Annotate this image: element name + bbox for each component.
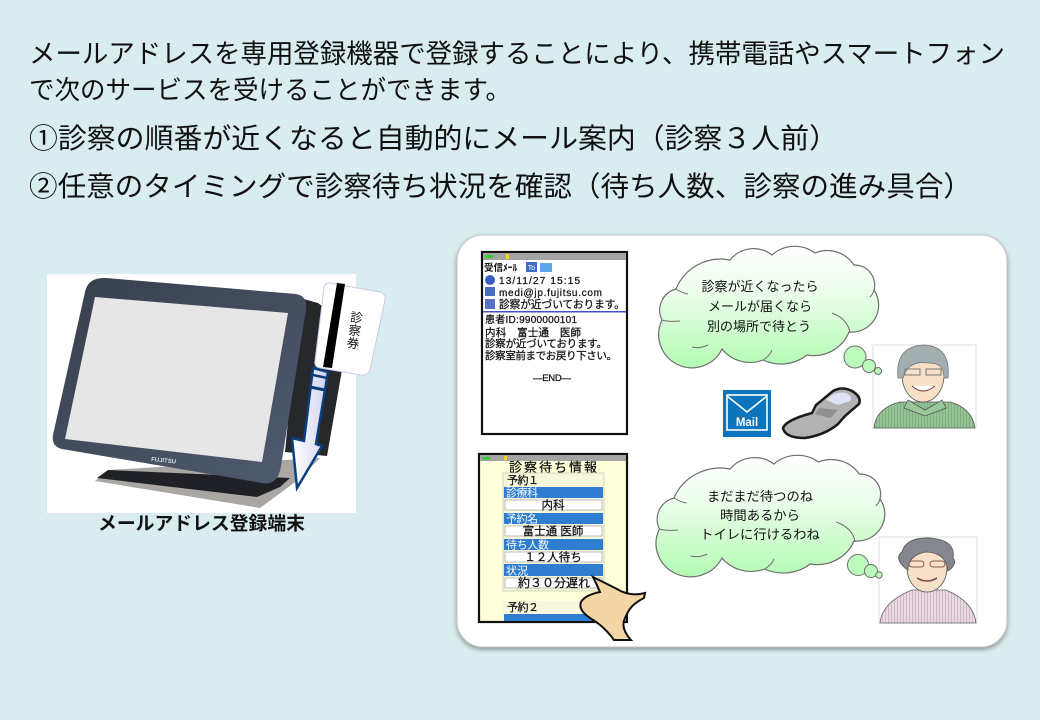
- thought cloud: woman: [656, 455, 885, 578]
- phone screen: waiting status: 予約名: [506, 512, 538, 526]
- heading: introduction and services: メールアドレスを専用登録機器で登録することにより、携帯電話やスマートフォン: [29, 39, 1005, 69]
- phone screen: notification mail: 13/11/27 15:15: [499, 276, 580, 287]
- terminal base: [95, 458, 320, 508]
- terminal logo: FUJITSU: [151, 457, 176, 466]
- thought cloud: woman: 時間あるから: [720, 508, 800, 523]
- heading: introduction and services: ②任意のタイミングで診察待ち状況を確認（待ち人数、診察の進み具合）: [29, 171, 972, 202]
- phone screen: waiting status: 富士通 医師: [523, 525, 583, 538]
- phone screen: waiting status: 内科: [542, 498, 565, 512]
- phone screen: notification mail: 内科 富士通 医師: [485, 326, 582, 339]
- caption: registration terminal: メールアドレス登録端末: [98, 513, 305, 534]
- phone screen: waiting status: 状況: [506, 564, 528, 578]
- thought cloud: man: 診察が近くなったら: [701, 279, 819, 294]
- thought cloud: man: [659, 246, 882, 374]
- card: consultation ticket: 察: [348, 323, 362, 339]
- phone screen: notification mail: 診察が近づいております。: [485, 337, 607, 350]
- icon: mail: Mail: [736, 417, 758, 429]
- phone screen: waiting status: 診察待ち情報: [509, 460, 597, 475]
- phone screen: waiting status: 予約１: [507, 473, 539, 487]
- illustration: registration terminal: [47, 274, 385, 513]
- heading: introduction and services: ①診察の順番が近くなると自動的にメール案内（診察３人前）: [29, 123, 838, 154]
- phone screen: waiting status: 予約２: [507, 600, 539, 614]
- thought cloud: man: 別の場所で待とう: [707, 319, 811, 334]
- phone screen: notification mail: 診察が近づいております。: [499, 298, 625, 311]
- thought cloud: woman: まだまだ待つのね: [707, 489, 813, 504]
- card: consultation ticket: 券: [346, 335, 361, 352]
- thought cloud: woman: トイレに行けるわね: [700, 527, 820, 542]
- panel: usage scenarios: [457, 235, 1007, 647]
- icon: mail: [723, 390, 771, 437]
- card: consultation ticket: 診: [349, 309, 364, 326]
- heading: introduction and services: で次のサービスを受けることができます。: [29, 75, 511, 105]
- terminal foot: [97, 470, 290, 497]
- terminal bezel: [53, 278, 306, 483]
- phone screen: notification mail: medi@jp.fujitsu.com: [499, 288, 602, 299]
- card: consultation ticket: [315, 283, 385, 375]
- phone screen: waiting status: 診療科: [506, 486, 538, 500]
- phone screen: notification mail: 診察室前までお戻り下さい。: [485, 349, 617, 362]
- phone screen: waiting status: [479, 454, 627, 622]
- arrow: insert card downward: [292, 368, 328, 488]
- phone screen: notification mail: —END—: [533, 373, 572, 384]
- thought cloud: man: メールが届くなら: [708, 299, 812, 314]
- icon: flip phone: [783, 388, 860, 438]
- phone screen: notification mail: To: [528, 265, 535, 272]
- phone screen: notification mail: [482, 252, 627, 434]
- phone screen: waiting status: １２人待ち: [524, 550, 582, 564]
- terminal back housing: [285, 298, 342, 456]
- terminal screen: [65, 297, 288, 462]
- portrait: elderly woman: [879, 537, 977, 623]
- icon: pointing hand: [580, 577, 645, 640]
- phone screen: waiting status: 待ち人数: [506, 538, 549, 552]
- phone screen: notification mail: 患者ID:9900000101: [485, 314, 577, 326]
- portrait: elderly man: [873, 345, 976, 428]
- phone screen: notification mail: 受信ﾒｰﾙ: [484, 262, 518, 274]
- heading: introduction and services: [29, 39, 1005, 202]
- phone screen: waiting status: 約３０分遅れ: [518, 575, 590, 590]
